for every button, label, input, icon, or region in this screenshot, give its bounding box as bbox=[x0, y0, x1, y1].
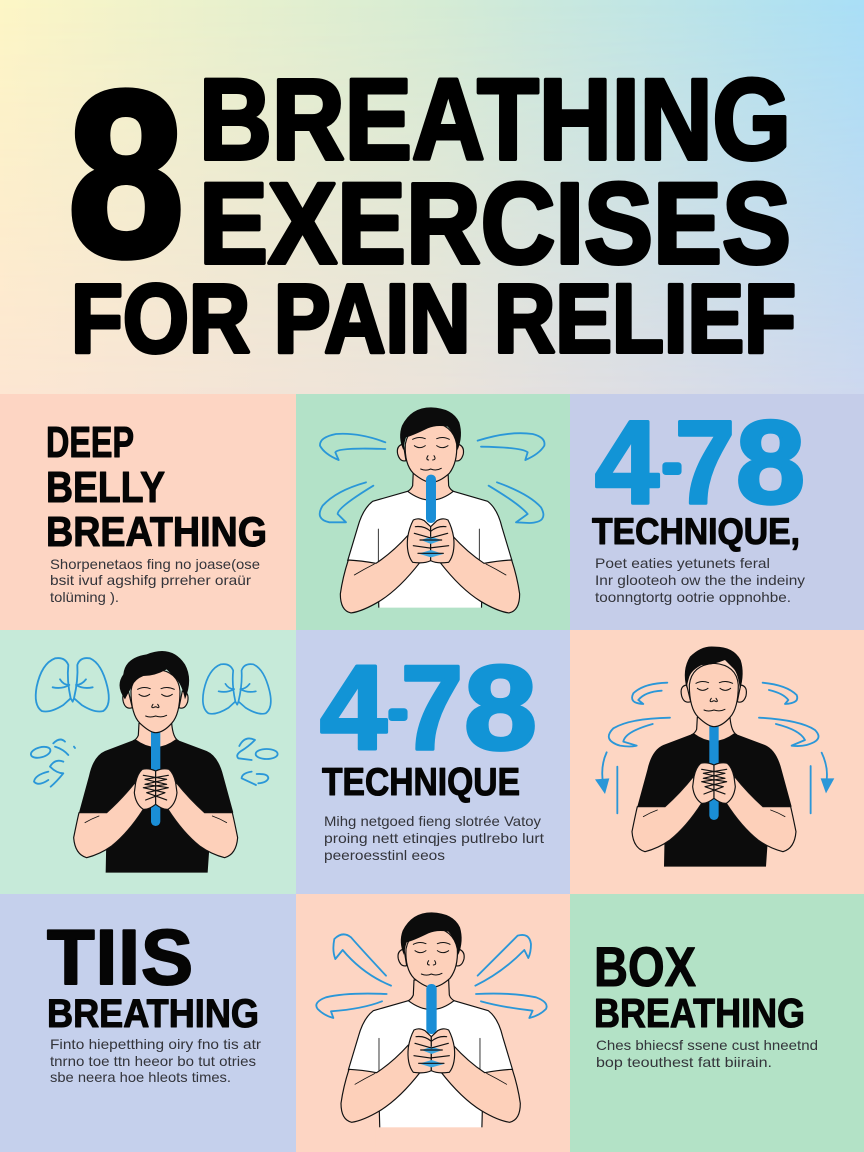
heading: technique: TECHNIQUE, bbox=[592, 511, 800, 552]
panel: illustration white shirt with upward swooshes bbox=[296, 894, 570, 1152]
icon: breath swooshes bbox=[320, 433, 544, 523]
icon: lungs right bbox=[203, 664, 271, 714]
text block: technique description bbox=[324, 813, 544, 863]
figure: person breathing, white shirt bbox=[320, 407, 544, 631]
text block: deep belly description: Shorpenetaos fing no joase(ose bbox=[50, 556, 260, 572]
heading: deep belly breathing: BREATHING bbox=[46, 508, 267, 555]
heading: box breathing: BOX bbox=[594, 935, 696, 998]
text block: technique description: Poet eaties yetunets feral bbox=[595, 555, 770, 571]
icon: lungs left bbox=[36, 658, 109, 712]
heading: deep belly breathing: DEEP bbox=[46, 418, 134, 467]
number: 4-78: 4 bbox=[320, 641, 387, 775]
title line: EXERCISES: EXERCISES bbox=[199, 160, 791, 288]
heading: technique: TECHNIQUE bbox=[322, 761, 520, 804]
panel: box breathing bbox=[570, 894, 864, 1152]
number: 4-78: - bbox=[390, 685, 406, 738]
text block: technique description: Inr glooteoh ow the the indeiny bbox=[595, 572, 805, 588]
heading: box breathing bbox=[594, 935, 805, 1036]
person body bbox=[340, 407, 520, 631]
panel: header background bbox=[0, 0, 864, 394]
heading: TIIS breathing bbox=[47, 913, 259, 1036]
figure: person with lungs bbox=[30, 651, 278, 873]
text block: TIIS description bbox=[50, 1036, 261, 1085]
text block: technique description: proing nett etinqjes putlrebo lurt bbox=[324, 830, 544, 846]
title numeral 8: 8 bbox=[68, 42, 184, 305]
panel: deep belly breathing bbox=[0, 394, 296, 630]
text block: box description bbox=[596, 1037, 818, 1070]
icon: breath squiggles bbox=[30, 738, 278, 787]
number: 4-78: 7 bbox=[401, 641, 463, 775]
number: 4-78 bbox=[320, 641, 537, 775]
hair bbox=[120, 651, 189, 699]
icon: right down arrow bbox=[811, 753, 834, 813]
number: 4-78: - bbox=[664, 439, 680, 492]
panel: illustration white shirt with side swooshes bbox=[296, 394, 570, 631]
heading: TIIS breathing: BREATHING bbox=[47, 992, 259, 1036]
text block: TIIS description: tnrno toe ttn heeor bo tut otries bbox=[50, 1053, 256, 1069]
icon: left down arrow bbox=[595, 752, 617, 813]
heading: deep belly breathing bbox=[46, 418, 267, 555]
icon: breath swooshes bbox=[316, 934, 547, 1018]
title bbox=[68, 42, 796, 373]
panel: TIIS breathing bbox=[0, 894, 296, 1152]
text block: deep belly description: bsit ivuf agshifg prreher oraür bbox=[50, 572, 251, 588]
text block: technique description: Mihg netgoed fieng slotrée Vatoy bbox=[324, 813, 541, 829]
hair bbox=[685, 646, 743, 690]
panel: illustration black shirt with lungs bbox=[0, 630, 296, 894]
number: 4-78: 7 bbox=[675, 397, 735, 529]
person body bbox=[632, 646, 796, 867]
number: 4-78: 8 bbox=[736, 397, 805, 529]
number: 4-78: 8 bbox=[464, 641, 537, 775]
title line: BREATHING: BREATHING bbox=[199, 56, 791, 184]
text block: deep belly description: tolüming ). bbox=[50, 589, 119, 605]
figure: person with downward arrows bbox=[595, 646, 834, 867]
heading: TIIS breathing: TIIS bbox=[47, 913, 193, 1001]
person body bbox=[74, 651, 238, 873]
figure: person breathing, wing swooshes bbox=[316, 912, 547, 1147]
person body bbox=[341, 912, 520, 1147]
number: 4-78: 4 bbox=[595, 397, 659, 529]
heading: deep belly breathing: BELLY bbox=[46, 463, 165, 512]
text block: technique description: toonngtortg ootrie oppnohbe. bbox=[595, 589, 791, 605]
text block: deep belly description bbox=[50, 556, 260, 605]
text block: box description: Ches bhiecsf ssene cust hneetnd bbox=[596, 1037, 818, 1053]
panel: 4-7-8 technique middle bbox=[296, 630, 570, 894]
text block: technique description: peeroesstinl eeos bbox=[324, 847, 445, 863]
text block: technique description bbox=[595, 555, 805, 605]
text block: TIIS description: Finto hiepetthing oiry fno tis atr bbox=[50, 1036, 261, 1052]
text block: box description: bop teouthest fatt biirain. bbox=[596, 1054, 772, 1070]
icon: breath swooshes bbox=[609, 683, 819, 746]
heading: box breathing: BREATHING bbox=[594, 990, 805, 1036]
text block: TIIS description: sbe neera hoe hleots times. bbox=[50, 1069, 231, 1085]
number: 4-78 bbox=[595, 397, 805, 529]
panel: illustration black shirt with arrows bbox=[570, 630, 864, 894]
panel: 4-7-8 technique top bbox=[570, 394, 864, 630]
